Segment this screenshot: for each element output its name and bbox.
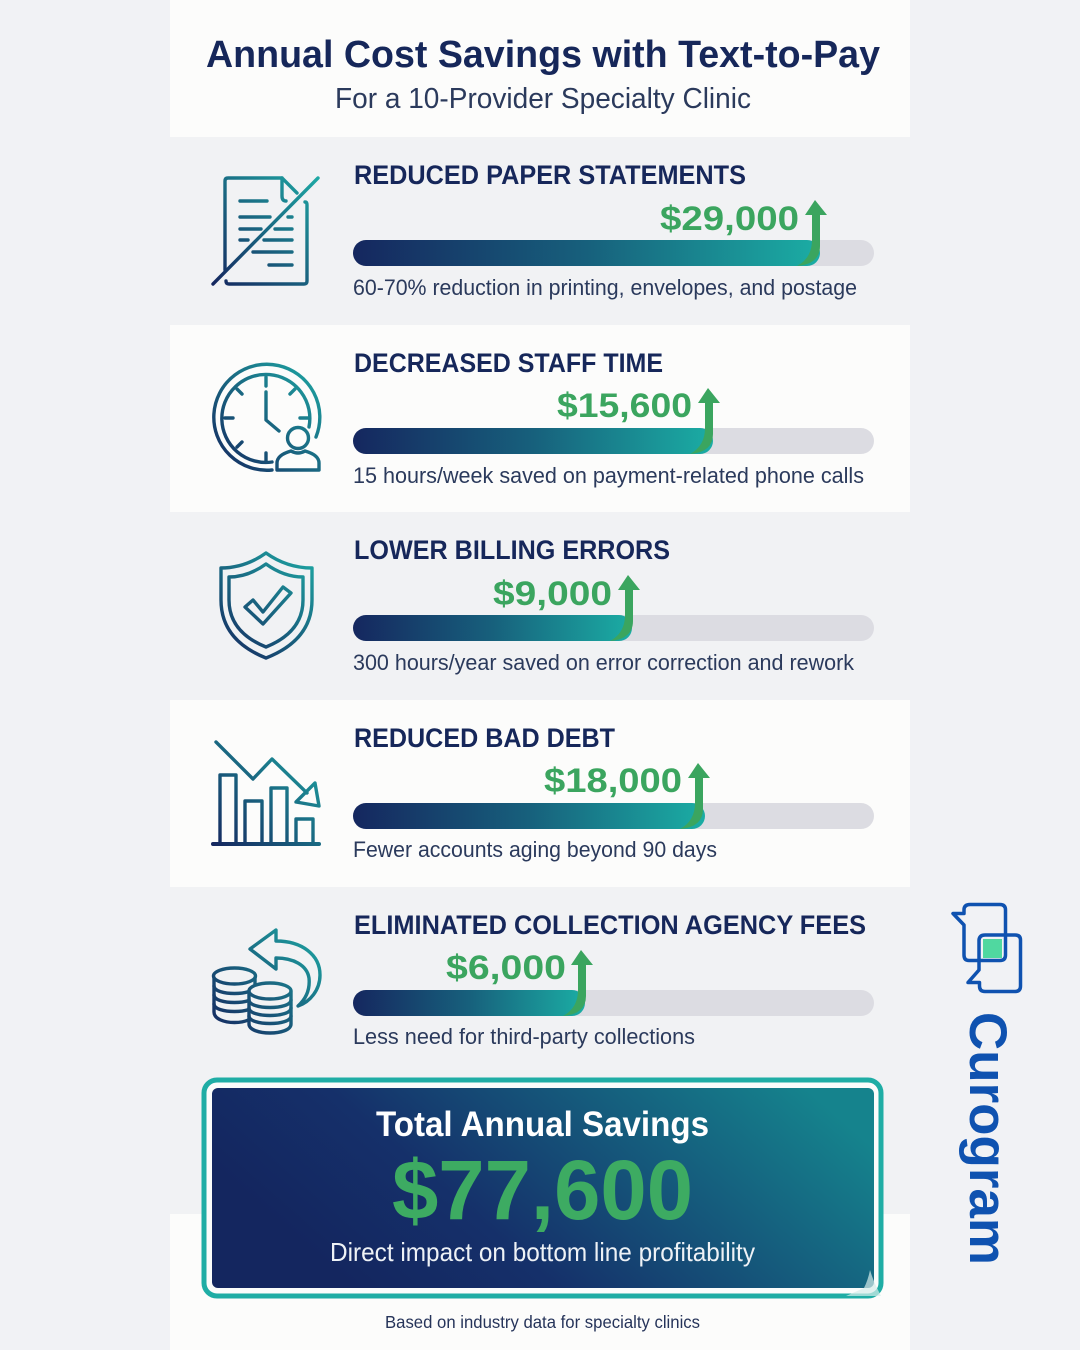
arrow (690, 388, 720, 454)
amount: $29,000 (660, 200, 799, 238)
panel: eliminated collection agency fees (170, 887, 910, 1214)
subtitle: For a 10-Provider Specialty Clinic (335, 83, 751, 115)
progress bar (353, 990, 874, 1016)
logo wordmark: Curogram (958, 1012, 1017, 1265)
callout description: Direct impact on bottom line profitability (330, 1237, 755, 1267)
heading: ELIMINATED COLLECTION AGENCY FEES (354, 910, 866, 940)
icon: declining bar chart (213, 742, 319, 844)
icon: crossed-out document (213, 178, 318, 284)
heading: REDUCED PAPER STATEMENTS (354, 160, 746, 190)
progress bar (353, 615, 874, 641)
title: Annual Cost Savings with Text-to-Pay (206, 34, 880, 76)
progress bar (353, 428, 874, 454)
panel: reduced bad debt (170, 700, 910, 887)
arrow (563, 950, 593, 1016)
icon: coins with return arrow (214, 930, 320, 1033)
total amount: $77,600 (392, 1143, 693, 1237)
total savings callout (204, 1080, 881, 1296)
heading: REDUCED BAD DEBT (354, 723, 615, 753)
amount: $9,000 (493, 575, 612, 613)
description: 60-70% reduction in printing, envelopes, and postage (353, 275, 857, 300)
callout heading: Total Annual Savings (376, 1105, 709, 1144)
icon: shield with check (221, 553, 312, 658)
panel: decreased staff time (170, 325, 910, 512)
logo icon: speech bubbles (953, 904, 1020, 992)
panel: reduced paper statements (170, 137, 910, 325)
heading: DECREASED STAFF TIME (354, 348, 663, 378)
panel: lower billing errors (170, 512, 910, 700)
progress bar (353, 803, 874, 829)
arrow (797, 200, 827, 266)
progress bar (353, 240, 874, 266)
amount: $18,000 (544, 762, 682, 800)
header panel (170, 0, 910, 137)
footer background (170, 1214, 910, 1350)
amount: $6,000 (446, 949, 566, 987)
corner glint (846, 1270, 881, 1296)
arrow (610, 575, 640, 641)
icon: clock with person (214, 364, 320, 470)
amount: $15,600 (557, 387, 692, 425)
description: 15 hours/week saved on payment-related phone calls (353, 463, 864, 488)
description: 300 hours/year saved on error correction and rework (353, 650, 855, 675)
arrow (680, 763, 710, 829)
source note: Based on industry data for specialty clinics (385, 1312, 700, 1332)
heading: LOWER BILLING ERRORS (354, 535, 670, 565)
logo: Curogram (953, 904, 1020, 1265)
description: Less need for third-party collections (353, 1024, 695, 1049)
description: Fewer accounts aging beyond 90 days (353, 837, 717, 862)
